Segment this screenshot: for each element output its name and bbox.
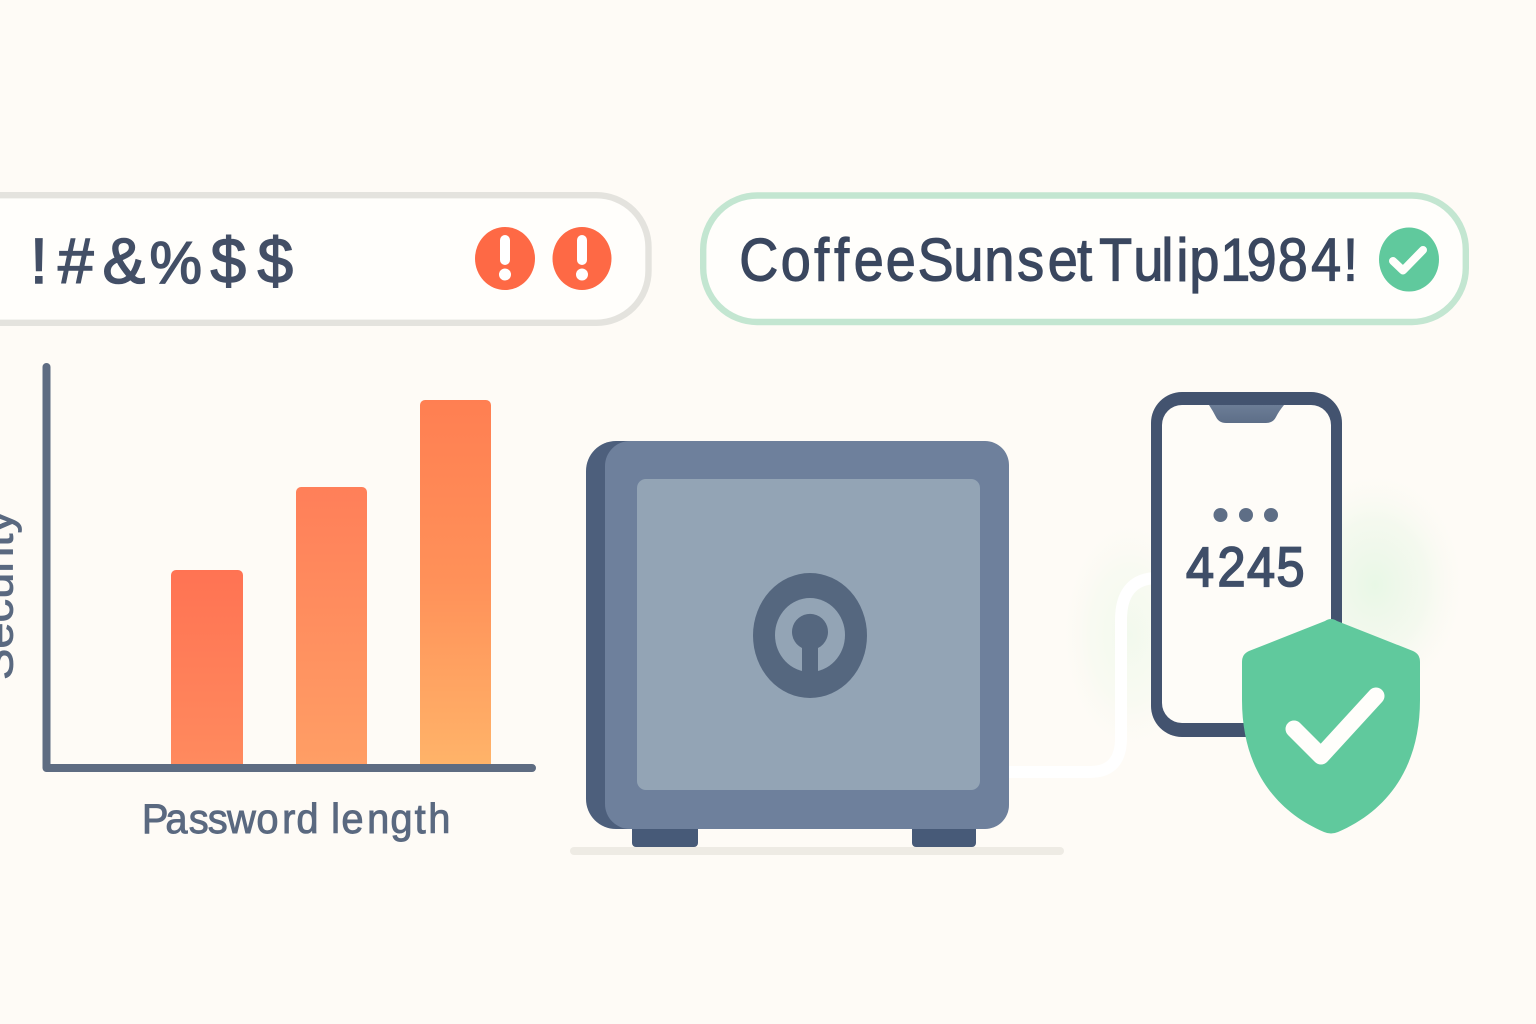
- safe body: [605, 441, 1009, 829]
- safe side: [586, 441, 686, 829]
- icon: warning one: [475, 227, 535, 290]
- safe feet: [632, 825, 698, 847]
- weak password text: %: [150, 230, 202, 296]
- icon: keyhole dial: [753, 573, 867, 698]
- icon: check badge: [1379, 228, 1439, 292]
- bar: medium: [296, 487, 367, 764]
- safe: [570, 441, 1064, 855]
- phone screen: [1162, 405, 1331, 723]
- glow behind phone: [1055, 465, 1470, 760]
- safe door: [637, 479, 980, 790]
- x axis label: Password length: [142, 795, 450, 842]
- dots: [1214, 508, 1278, 522]
- phone: [1151, 392, 1342, 737]
- bar: short: [171, 570, 243, 764]
- weak password field: [0, 195, 648, 323]
- connector cable: [1005, 578, 1155, 772]
- weak password text: $$: [210, 225, 293, 297]
- bar: tall: [420, 400, 491, 764]
- weak password text: !#&: [30, 225, 145, 297]
- phone notch: [1209, 405, 1284, 423]
- chart axes: [46, 367, 532, 768]
- verification code: 4245: [1186, 537, 1305, 599]
- strong password field: [703, 196, 1466, 322]
- strong password text: CoffeeSunsetTulip1984!: [739, 227, 1358, 294]
- icon: warning two: [552, 227, 612, 290]
- phone body: [1151, 392, 1342, 737]
- safe shadow: [570, 847, 1064, 855]
- bar chart: [0, 367, 532, 842]
- icon: green shield with check: [1242, 619, 1420, 834]
